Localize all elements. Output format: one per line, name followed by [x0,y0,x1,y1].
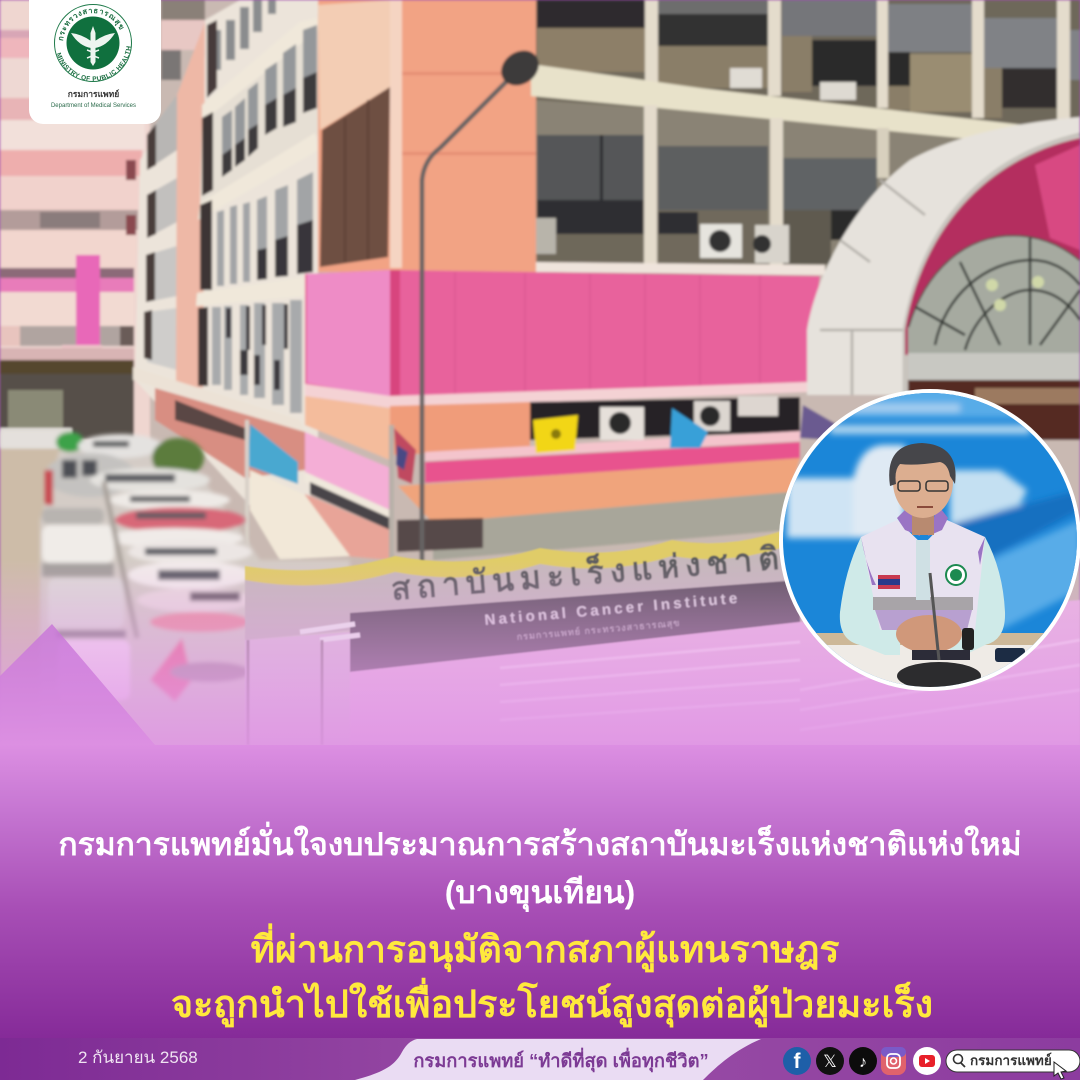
ministry seal: Department of Medical Services [51,103,136,109]
lower floor and awning [250,396,800,560]
headline yellow: จะถูกนำไปใช้เพื่อประโยชน์สูงสุดต่อผู้ป่วยมะเร็ง [171,983,933,1025]
social icon: youtube [913,1047,941,1075]
triangle accent [0,624,155,745]
upper window floors [531,0,1080,275]
headline yellow: ที่ผ่านการอนุมัติจากสภาผู้แทนราษฎร [251,929,839,970]
sign wall: National Cancer Institute: สถาบันมะเร็งแห่งชาติ [390,537,786,607]
footer slogan ribbon: กรมการแพทย์ “ทำดีที่สุด เพื่อทุกชีวิต” [413,1047,709,1073]
headline white: (บางขุนเทียน) [445,874,635,910]
footer slogan ribbon [355,1039,761,1080]
social icon: X [816,1047,844,1075]
headline white: กรมการแพทย์มั่นใจงบประมาณการสร้างสถาบันมะเร็งแห่งชาติแห่งใหม่ [58,826,1022,862]
man head [912,516,934,535]
social icon: facebook [783,1047,811,1075]
ministry seal: กระทรวงสาธารณสุข [58,8,124,41]
ministry seal: MINISTRY OF PUBLIC HEALTH [56,46,131,81]
dome entrance arch [807,117,1080,440]
purple gradient panel [0,745,1080,1040]
social icon: X: 𝕏 [823,1052,837,1071]
social icon: instagram [881,1047,906,1075]
portrait circle [779,388,1080,695]
social icon: tiktok: ♪ [859,1054,867,1071]
road [0,448,80,760]
footer strip [0,1038,1080,1080]
headline yellow [171,923,933,1028]
search box: กรมการแพทย์ [970,1052,1052,1068]
sign wall: National Cancer Institute [245,528,1080,750]
man jacket [840,537,900,655]
table [816,633,1044,645]
social icon: tiktok [849,1047,877,1075]
man hands and watch [896,615,962,653]
man vest [861,520,985,630]
flags [245,405,836,750]
headline white [58,822,1022,912]
orange tower with brown panel [318,0,536,272]
left wing of building [133,0,318,560]
parked cars [0,430,350,750]
distant pink building [0,0,205,450]
ministry seal: กรมการแพทย์ [68,89,119,99]
sign wall: National Cancer Institute: National Cancer Institute [484,590,741,629]
sign wall: National Cancer Institute: กรมการแพทย์ กระทรวงสาธารณสุข [516,617,681,643]
lamp post [422,43,546,750]
social icon: facebook: f [794,1050,802,1073]
pink band [305,270,820,408]
logo card [29,0,161,124]
date: 2 กันยายน 2568 [78,1048,198,1067]
search box [946,1050,1080,1079]
fade overlay [0,560,1080,750]
ministry seal [51,4,136,109]
